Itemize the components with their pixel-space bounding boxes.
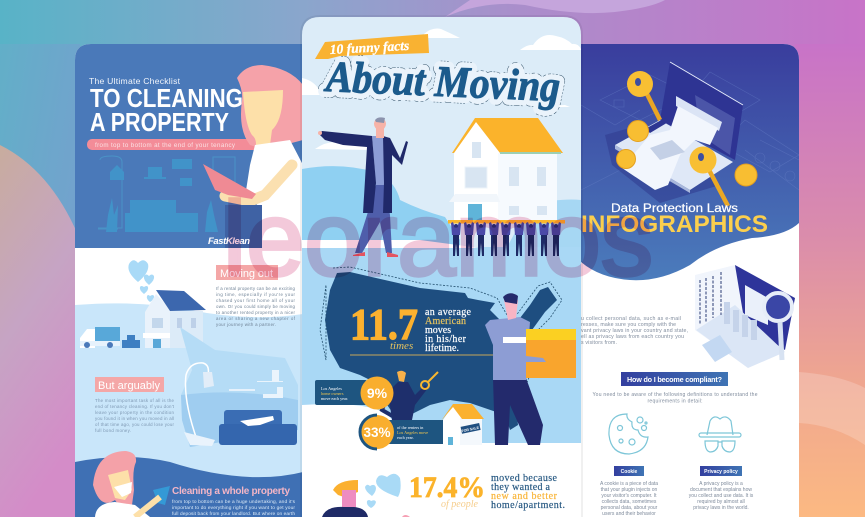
white wave xyxy=(302,404,581,517)
text: privacy policy: document that explains how xyxy=(690,487,752,493)
illustration: laptop with magnifier xyxy=(695,265,795,368)
callout: 9 percent: home owners xyxy=(321,391,344,396)
title line 1: TO CLEANING xyxy=(90,83,243,113)
illustration: porters xyxy=(451,222,561,256)
stat text: moved because xyxy=(491,473,558,484)
text: moving out: If a rental property can be an exciting xyxy=(216,286,296,291)
circuit lines xyxy=(581,72,799,190)
text: privacy policy: A privacy policy is a xyxy=(699,481,743,487)
text: cleaning a whole property: full deposit back from your landlord. But where on earth xyxy=(172,511,295,517)
illustration: man carrying box xyxy=(485,293,576,445)
text: intro: ell as privacy laws from each country you xyxy=(581,334,684,340)
cookie label xyxy=(614,466,644,476)
panel: cleaning checklist xyxy=(75,44,303,517)
text: but arguably: you found it in when you moved in all xyxy=(95,416,174,421)
title line 2: A PROPERTY xyxy=(90,107,229,137)
white ribbon xyxy=(302,240,480,248)
callout: 33 percent: each year. xyxy=(397,435,414,440)
illustration: man pointing xyxy=(318,117,408,257)
cookie label: Cookie xyxy=(621,469,638,475)
stat text: they wanted a xyxy=(491,482,551,493)
stat text xyxy=(425,307,472,354)
stat: 11.7 times: 11.7 xyxy=(350,300,418,349)
panel: data protection laws xyxy=(581,44,799,517)
callout: 33 percent: Los Angeles move xyxy=(397,430,428,435)
illustration: house and truck xyxy=(80,290,206,348)
heading: data protection laws: Data Protection Laws xyxy=(611,203,738,215)
text: privacy policy xyxy=(689,481,754,511)
text: but arguably: end of tenancy cleaning. If you don't xyxy=(95,404,175,409)
privacy label xyxy=(700,466,742,476)
stat: 11.7 times: times xyxy=(390,340,413,352)
privacy label: Privacy policy xyxy=(704,469,738,475)
stat: 17.4 percent: 17.4% xyxy=(409,471,485,504)
text: cleaning a whole property xyxy=(172,499,296,517)
text: moving out xyxy=(216,286,296,327)
text: intro: vant privacy laws in your country and state, xyxy=(581,328,688,334)
moving out label: Moving out xyxy=(220,268,273,280)
icon: cookie xyxy=(609,414,648,454)
callout: 33 percent xyxy=(360,415,445,449)
illustration: house on platform xyxy=(448,118,565,224)
text: moving out: own. Or you could simply be moving xyxy=(216,304,296,309)
text: cookie: your visitor's computer. It xyxy=(601,493,657,499)
card edge shadow xyxy=(301,16,582,517)
text: intro: resses, make sure you comply with the xyxy=(581,322,676,328)
text: intro: u collect personal data, such as e-mail xyxy=(581,316,681,322)
heading: infographics: INFOGRAPHICS xyxy=(581,211,768,238)
text: cookie: that your plugin injects on xyxy=(601,487,658,493)
callout: 9 percent: Los Angeles xyxy=(321,386,342,391)
stat text: lifetime. xyxy=(425,343,459,354)
text: but arguably: leave your property in the condition xyxy=(95,410,175,415)
illustration: woman with key xyxy=(382,371,438,420)
bottom blue wave xyxy=(75,457,303,517)
hills xyxy=(302,166,460,260)
illustration: woman orange hair xyxy=(322,480,410,517)
illustration: laptop with receipt xyxy=(605,62,743,203)
compliance heading: How do I become compliant? xyxy=(627,375,722,384)
heading: cleaning a whole property: Cleaning a whole property xyxy=(172,486,290,497)
text: definitions intro: requirements in detail: xyxy=(648,398,702,404)
illustration: small house for rent xyxy=(441,404,484,445)
text: privacy policy: you collect and use data. It is xyxy=(689,493,754,499)
icon: coins xyxy=(616,120,757,186)
text: cookie: personal data, about your xyxy=(601,505,658,511)
stat text: an average xyxy=(425,307,472,318)
callout: 9 percent: move each year. xyxy=(321,396,348,401)
text: moving out: to another rented property in a nicer xyxy=(216,310,296,315)
text: cookie: A cookie is a piece of data xyxy=(600,481,658,487)
stat text: home/apartment. xyxy=(491,500,565,511)
pink ribbon: from top to bottom at the end of your tenancy xyxy=(95,142,236,149)
text: definitions intro: You need to be aware of the following definitions to understand the xyxy=(592,392,758,398)
panel: about moving xyxy=(302,17,581,517)
map of USA xyxy=(320,267,562,440)
text: privacy policy: required by almost all xyxy=(697,499,745,505)
text: cookie: collects data, sometimes xyxy=(602,499,657,505)
icon: hat and glasses xyxy=(699,417,741,452)
text: moving out: your journey with a partner. xyxy=(216,322,276,327)
header background xyxy=(75,44,303,248)
text: intro: s visitors from. xyxy=(581,340,617,346)
text: but arguably xyxy=(95,398,175,433)
compliance heading xyxy=(621,372,728,386)
divider xyxy=(350,354,493,356)
icon: hearts xyxy=(128,260,154,302)
stat: 17.4 percent: of people xyxy=(441,499,478,510)
callout: 9 percent xyxy=(315,376,394,410)
blue header xyxy=(581,44,799,280)
text: moving out: ing time, especially if you're your xyxy=(216,292,296,297)
text: cookie xyxy=(600,481,658,517)
text: but arguably: of that time ago, you could lose your xyxy=(95,422,175,427)
light blue section xyxy=(75,303,303,480)
text: definitions intro xyxy=(592,392,758,404)
but arguably label: But arguably xyxy=(98,380,160,392)
stat text: in his/her xyxy=(425,334,467,345)
watermark: leoramos xyxy=(223,181,653,298)
callout: 33 percent: 33% xyxy=(363,425,391,440)
subtitle: The Ultimate Checklist xyxy=(89,76,181,86)
stat text: American xyxy=(425,316,466,327)
stat text: moves xyxy=(425,325,451,336)
icon: room furniture silhouette xyxy=(98,156,235,232)
stat text xyxy=(491,473,565,511)
text: cookie: users and their behavior xyxy=(602,511,656,517)
icon: gold key xyxy=(627,71,660,120)
moving out label xyxy=(216,265,278,280)
text: intro xyxy=(581,316,688,346)
title script: About Moving xyxy=(322,52,561,111)
text: but arguably: The most important task of all is the xyxy=(95,398,175,403)
banner xyxy=(315,34,429,59)
callout: 33 percent: of the renters in xyxy=(397,425,424,430)
text: moving out: area or sharing a new chapter of xyxy=(216,316,296,321)
illustration: small house for rent: FOR SALE xyxy=(461,426,480,433)
text: cleaning a whole property: important to do everything right if you want to get your xyxy=(172,505,295,511)
illustration: woman with clipboard xyxy=(203,65,303,248)
text: but arguably: full bond money. xyxy=(95,428,131,433)
callout: 9 percent: 9% xyxy=(367,385,388,401)
pink ribbon xyxy=(87,139,262,150)
text: moving out: chased your first home all of your xyxy=(216,298,296,303)
banner: 10 funny facts xyxy=(329,38,410,57)
sky lower band xyxy=(302,247,581,445)
title script: About Moving xyxy=(322,52,561,111)
illustration: woman with mask and spray xyxy=(93,451,170,517)
illustration: room with lamp and sofa xyxy=(180,327,298,447)
clouds xyxy=(302,29,581,150)
stat text: new and better xyxy=(491,491,558,502)
icon: gold key large xyxy=(690,146,728,206)
text: cleaning a whole property: from top to bottom can be a huge undertaking, and it's xyxy=(172,499,296,505)
logo: FastKlean xyxy=(208,236,250,247)
text: privacy policy: privacy laws in the world. xyxy=(693,505,749,511)
icon: hearts blue xyxy=(365,474,401,508)
title script: About Moving xyxy=(322,52,561,111)
